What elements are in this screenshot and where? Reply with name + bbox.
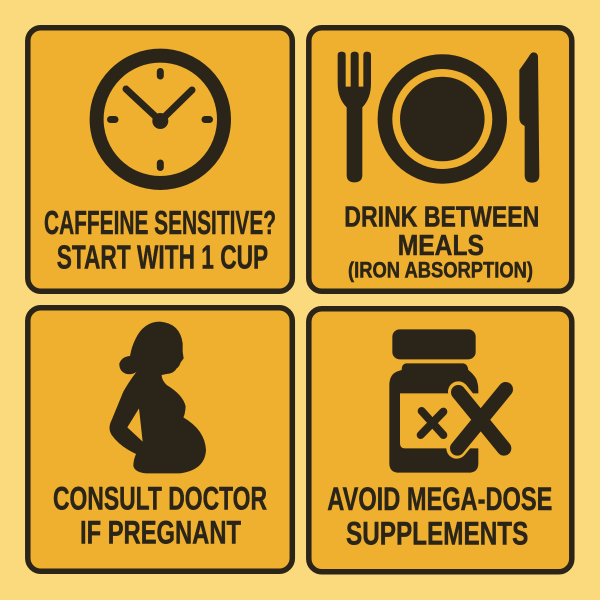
icon: plate xyxy=(378,54,507,184)
icon: clock xyxy=(97,56,224,183)
icon: knife xyxy=(519,52,539,183)
heading: drink between: DRINK BETWEEN xyxy=(344,202,539,234)
text: supplements: SUPPLEMENTS xyxy=(346,515,528,551)
panel: caffeine sensitive xyxy=(28,28,292,291)
panel frame xyxy=(309,309,572,572)
panel: avoid mega-dose xyxy=(309,309,572,572)
text: if pregnant: IF PREGNANT xyxy=(80,514,241,550)
icon: fork xyxy=(338,52,371,182)
text: start with 1 cup: START WITH 1 CUP xyxy=(57,239,268,276)
panel frame xyxy=(28,308,292,571)
text: iron absorption: (IRON ABSORPTION) xyxy=(348,258,533,283)
panel: drink between meals xyxy=(309,28,572,291)
heading: caffeine sensitive: CAFFEINE SENSITIVE? xyxy=(44,204,276,241)
heading: meals: MEALS xyxy=(398,230,484,262)
panel frame xyxy=(309,28,572,291)
icon: supplement bottle with cross xyxy=(389,329,507,473)
panel frame xyxy=(28,28,292,291)
heading: consult doctor: CONSULT DOCTOR xyxy=(53,480,267,516)
icon: pregnant woman silhouette xyxy=(109,322,206,473)
panel: consult doctor xyxy=(28,308,292,571)
